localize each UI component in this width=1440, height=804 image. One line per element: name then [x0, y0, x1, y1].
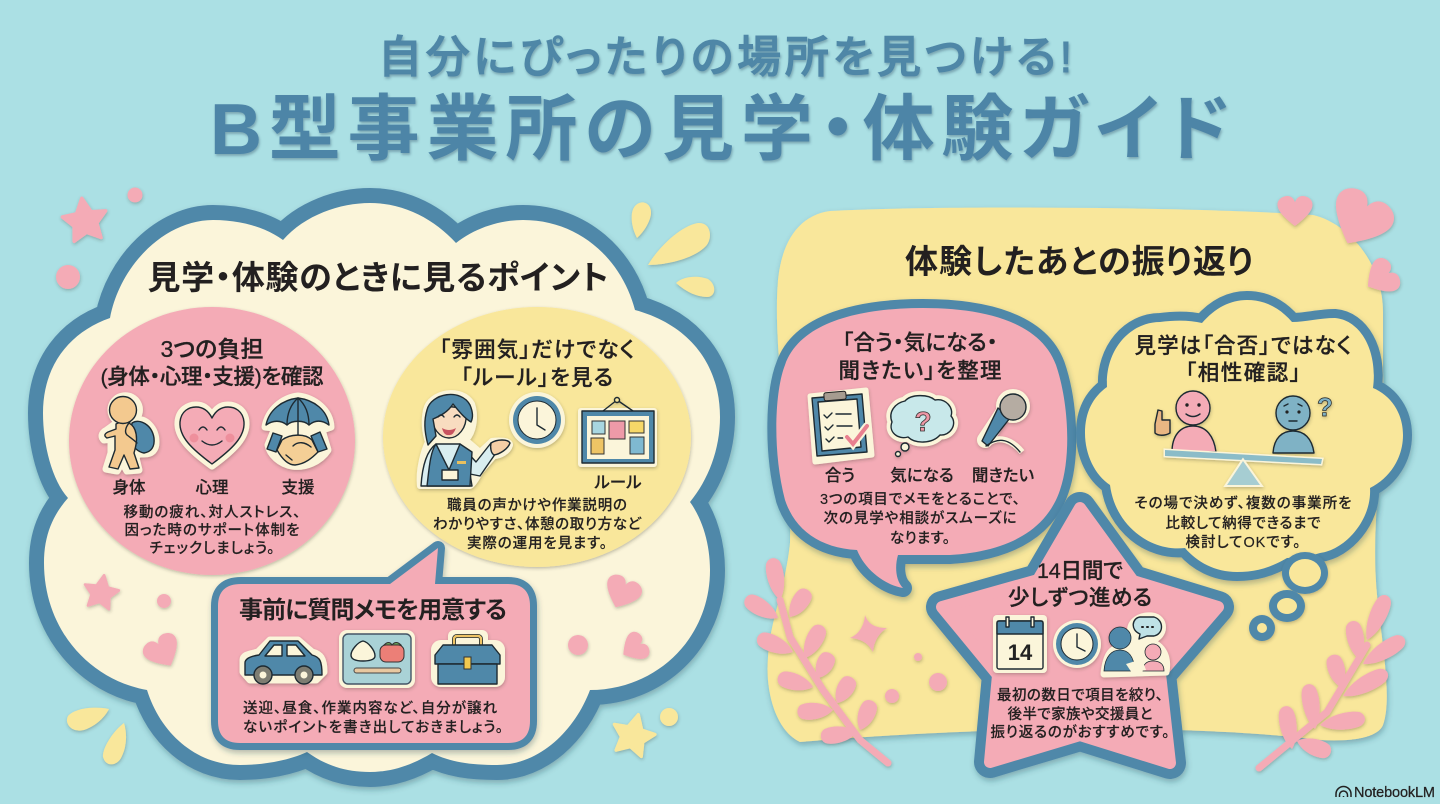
- card body text: 次の見学や相談がスムーズに: [824, 509, 1016, 527]
- title: [210, 33, 1230, 170]
- card heading: [838, 331, 1002, 383]
- icon: balance with two people: ?: [1317, 392, 1333, 422]
- logo mark: [1336, 786, 1351, 797]
- card body text: 移動の疲れ、対人ストレス、: [124, 504, 300, 521]
- card body text: チェックしましょう。: [150, 540, 274, 557]
- decoration: hearts top right: [1278, 182, 1404, 302]
- icon: lunch tray: [339, 630, 415, 688]
- panel: right yellow paper, reflection: [741, 182, 1409, 768]
- label: curious: 気になる: [890, 466, 954, 485]
- thought cloud shape: [1085, 300, 1403, 572]
- icon: rule board: [578, 398, 657, 467]
- card body text: 最初の数日で項目を絞り、: [997, 687, 1163, 704]
- label: want to ask: 聞きたい: [972, 466, 1034, 485]
- icon: clipboard: [810, 390, 872, 462]
- callout body text: 送迎、昼食、作業内容など、自分が譲れ: [243, 699, 498, 717]
- icon: toolbox: [431, 630, 505, 687]
- yellow circle: [383, 307, 691, 567]
- heading: visit points: 見学・体験のときに見るポイント: [148, 259, 608, 296]
- icon: family consultation: [1104, 616, 1167, 674]
- decoration: right branch: [1259, 592, 1409, 768]
- card heading: 見学は「合否」ではなく: [1134, 334, 1352, 358]
- card body text: 振り返るのがおすすめです。: [990, 723, 1170, 741]
- icon: calendar: 14: [1008, 640, 1033, 665]
- icon: clock: [1053, 620, 1101, 668]
- card body text: [433, 496, 642, 552]
- icon: balance with two people: [1155, 391, 1333, 485]
- card body text: その場で決めず、複数の事業所を: [1134, 495, 1352, 512]
- card: three burdens: [69, 307, 355, 575]
- icon: staff member: [420, 393, 510, 486]
- card body text: [820, 491, 1020, 547]
- title line 2: B型事業所の見学・体験ガイド: [210, 90, 1230, 170]
- card heading: 「相性確認」: [1186, 361, 1300, 385]
- label: body: 身体: [112, 478, 146, 497]
- card body text: [124, 504, 300, 557]
- label: support: 支援: [282, 478, 315, 497]
- icon: car: [243, 640, 324, 684]
- icon: question thought bubble: ?: [914, 406, 932, 437]
- heading: reflection: 体験したあとの振り返り: [905, 243, 1253, 280]
- card body text: 職員の声かけや作業説明の: [447, 496, 627, 514]
- logo: NotebookLM: [1336, 785, 1435, 801]
- star blue backing: [942, 508, 1218, 763]
- decoration: left panel shapes: [56, 188, 714, 764]
- card heading: [440, 338, 634, 390]
- card body text: [1134, 495, 1352, 551]
- card body text: 因った時のサポート体制を: [124, 522, 300, 539]
- thought trail circles: [1249, 552, 1328, 641]
- card: atmosphere and rules: [383, 307, 691, 567]
- card body text: 検討してOKです。: [1186, 534, 1300, 551]
- decoration: left branch: [741, 557, 888, 763]
- card heading: 3つの負担: [160, 336, 264, 362]
- pink circle: [69, 307, 355, 575]
- speech bubble shape: [776, 308, 1067, 588]
- icon: calendar: [993, 615, 1047, 673]
- card heading: 「合う・気になる・: [842, 331, 998, 355]
- yellow paper shape: [767, 208, 1387, 742]
- card body text: 3つの項目でメモをとることで、: [820, 491, 1020, 508]
- card: question memo callout: [218, 548, 530, 743]
- cloud background: [43, 203, 720, 772]
- icon: smiling heart: [178, 405, 246, 466]
- card: organise notes speech bubble: [776, 308, 1067, 588]
- label: rules: ルール: [594, 474, 642, 492]
- card heading: 「ルール」を見る: [461, 366, 613, 390]
- icon: person with backpack: [102, 396, 156, 471]
- card heading: [1134, 334, 1352, 385]
- label: mind: 心理: [196, 478, 228, 497]
- card body text: [990, 687, 1170, 741]
- card heading: [1008, 559, 1152, 610]
- callout body text: [243, 699, 503, 736]
- card: 14 days star: [942, 508, 1218, 763]
- card: compatibility thought cloud: [1085, 300, 1403, 641]
- icon: microphone: [982, 389, 1030, 452]
- title line 1: 自分にぴったりの場所を見つける!: [378, 33, 1072, 82]
- card heading: 聞きたい」を整理: [838, 359, 1002, 383]
- callout body text: ないポイントを書き出しておきましょう。: [243, 719, 503, 736]
- star pink face: [942, 508, 1218, 763]
- card body text: わかりやすさ、体憩の取り方など: [433, 516, 642, 533]
- card heading: 「雰囲気」だけでなく: [440, 338, 634, 362]
- card heading: 14日間で: [1037, 559, 1123, 583]
- icon: question thought bubble: [891, 396, 954, 456]
- icon: umbrella and handshake: [265, 396, 331, 466]
- decoration: sparkle and dots: [850, 615, 947, 703]
- card body text: 比較して納得できるまで: [1166, 515, 1321, 532]
- card subheading: (身体・心理・支援)を確認: [100, 365, 324, 389]
- card body text: 実際の運用を見ます。: [467, 535, 607, 552]
- panel: left cloud, visit points: [43, 188, 720, 772]
- label: fits: 合う: [825, 466, 855, 485]
- callout shape: [218, 548, 530, 743]
- card body text: 後半で家族や交援員と: [1008, 706, 1152, 723]
- icon: clock: [509, 392, 565, 448]
- logo wordmark: NotebookLM: [1354, 785, 1435, 801]
- card body text: なります。: [890, 530, 950, 547]
- card heading: 少しずつ進める: [1008, 586, 1152, 610]
- callout heading: 事前に質問メモを用意する: [239, 597, 507, 624]
